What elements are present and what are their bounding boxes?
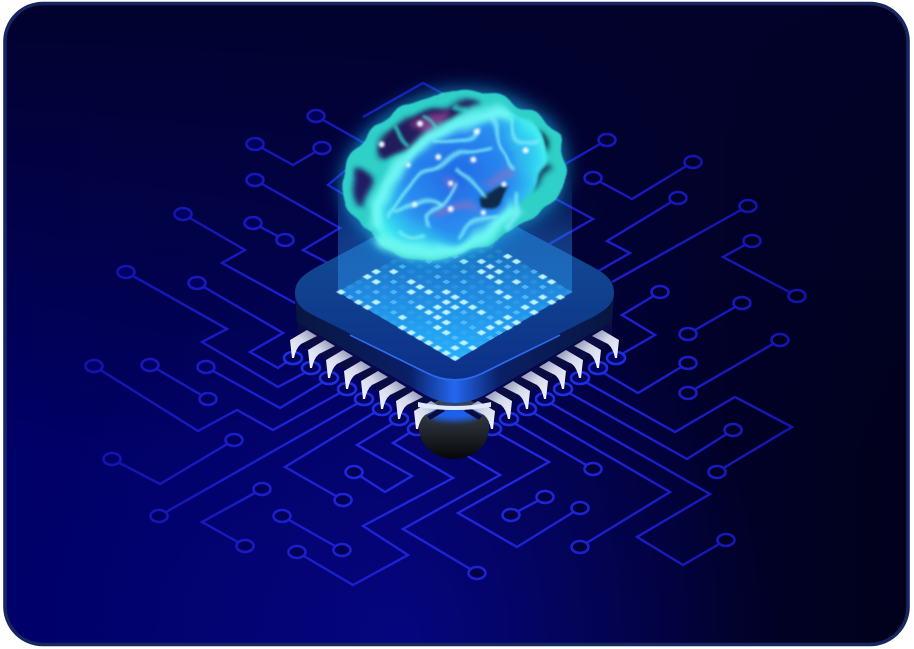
chip pads [284,352,625,435]
bright pixel dots on screen [341,226,569,358]
brain outer glow [343,92,564,260]
brain sparkle points [379,121,529,215]
chip edge highlight [350,335,560,380]
brain dark spot [478,187,507,209]
brain [343,92,564,260]
chip underside shadow [298,322,612,408]
black dome under chip [419,397,489,459]
brain back lobe [343,92,564,260]
brain front lobe [372,108,545,253]
brain bright rim [373,113,517,253]
brain teal strands over back lobe [393,105,465,143]
chip top surface [295,201,614,379]
blue glow on dome [428,407,480,421]
circuit end nodes [86,110,806,579]
brain body [343,92,564,260]
chip body side [295,296,614,403]
circuit traces [94,83,797,585]
chip pins [290,330,619,429]
brain veins [390,115,537,240]
brain dark folds [355,102,551,210]
brain purple folds [437,170,517,213]
white strip under chip [418,402,491,410]
hologram light column [338,180,572,360]
dim pixel dots on screen [339,225,571,359]
chip screen [338,225,572,361]
